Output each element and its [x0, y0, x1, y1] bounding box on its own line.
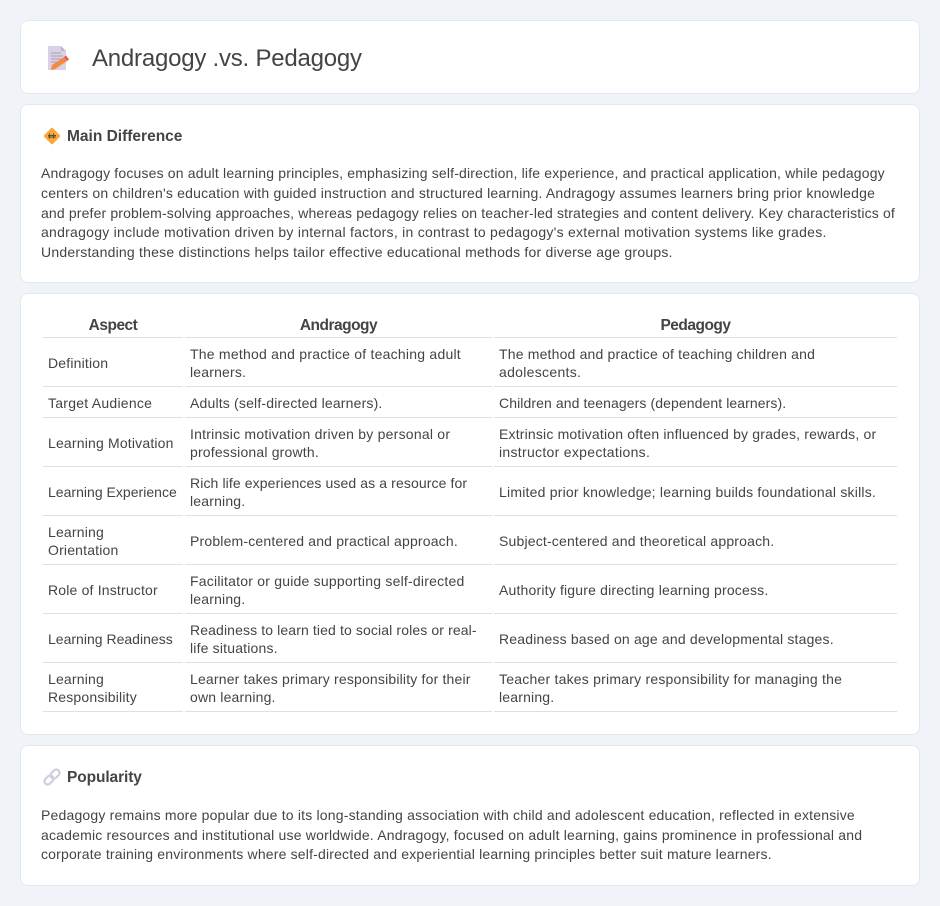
text block: popularity: Pedagogy remains more popular due to its long-standing association with child and adolescent education, reflected in extensive	[41, 807, 855, 823]
icon: document with pencil	[48, 46, 69, 70]
text block: main difference: andragogy include motivation driven by internal factors, in contrast to pedagogy's external motivation systems like grades.	[41, 224, 827, 240]
comparison table	[43, 317, 897, 712]
table header: andragogy: Andragogy	[300, 317, 377, 334]
comparison table: Learning	[48, 524, 104, 540]
comparison table: The method and practice of teaching adult	[190, 346, 461, 362]
comparison table: Orientation	[48, 542, 118, 558]
text block: main difference: and prefer problem-solving approaches, whereas pedagogy relies on teacher-led strategies and content delivery. Key characteristics of	[41, 205, 895, 221]
text block: main difference: centers on children's education with guided instruction and structured learning. Andragogy assumes learners bring prior knowledge	[41, 185, 875, 201]
row: definition	[48, 346, 815, 380]
row: target audience	[48, 395, 786, 411]
comparison table: Learner takes primary responsibility for their	[190, 671, 471, 687]
comparison table: Extrinsic motivation often influenced by grades, rewards, or	[499, 426, 876, 442]
text block: popularity: corporate training environments where self-directed and experiential learning principles better suit mature learners.	[41, 846, 772, 862]
comparison table: Facilitator or guide supporting self-directed	[190, 573, 464, 589]
comparison table: Children and teenagers (dependent learners).	[499, 395, 786, 411]
table header: pedagogy: Pedagogy	[660, 317, 731, 334]
comparison table: The method and practice of teaching children and	[499, 346, 815, 362]
panel: main difference	[20, 104, 920, 283]
comparison table: professional growth.	[190, 444, 319, 460]
comparison table: learning.	[190, 591, 245, 607]
heading: popularity: Popularity	[67, 769, 142, 786]
comparison table: Readiness based on age and developmental stages.	[499, 631, 834, 647]
text block: main difference: Andragogy focuses on adult learning principles, emphasizing self-direction, life experience, and practical application, while pedagogy	[41, 165, 885, 181]
comparison table: Learning Experience	[48, 484, 177, 500]
table header: aspect: Aspect	[89, 317, 137, 334]
panel: comparison table	[20, 293, 920, 735]
comparison table: Teacher takes primary responsibility for managing the	[499, 671, 842, 687]
title: Andragogy .vs. Pedagogy	[92, 45, 362, 72]
comparison table: learners.	[190, 364, 246, 380]
icon: chain link	[43, 768, 61, 786]
text block: main difference	[41, 165, 895, 260]
row: learning experience	[48, 475, 876, 509]
comparison table: Rich life experiences used as a resource for	[190, 475, 467, 491]
comparison table: own learning.	[190, 689, 276, 705]
comparison table: Limited prior knowledge; learning builds foundational skills.	[499, 484, 876, 500]
comparison table: Readiness to learn tied to social roles or real-	[190, 622, 477, 638]
comparison table: Learning Motivation	[48, 435, 174, 451]
comparison table: learning.	[499, 689, 554, 705]
row: role of instructor	[48, 573, 768, 607]
comparison table: instructor expectations.	[499, 444, 650, 460]
comparison table: adolescents.	[499, 364, 581, 380]
comparison table: Intrinsic motivation driven by personal or	[190, 426, 450, 442]
comparison table: Responsibility	[48, 689, 137, 705]
comparison table: Subject-centered and theoretical approach.	[499, 533, 774, 549]
comparison table: Learning Readiness	[48, 631, 173, 647]
text block: main difference: Understanding these distinctions helps tailor effective educational methods for diverse age groups.	[41, 244, 673, 260]
comparison table: learning.	[190, 493, 245, 509]
icon: diamond warning sign	[44, 128, 60, 144]
row: learning motivation	[48, 426, 876, 460]
comparison table: Role of Instructor	[48, 582, 158, 598]
row: learning readiness	[48, 622, 834, 656]
panel: title	[20, 20, 920, 94]
comparison table: Problem-centered and practical approach.	[190, 533, 458, 549]
heading: main difference: Main Difference	[67, 128, 182, 145]
comparison table: life situations.	[190, 640, 278, 656]
comparison table: Definition	[48, 355, 108, 371]
comparison table: Adults (self-directed learners).	[190, 395, 382, 411]
comparison table: Authority figure directing learning process.	[499, 582, 768, 598]
comparison table: Learning	[48, 671, 104, 687]
panel: popularity	[20, 745, 920, 886]
text block: popularity	[41, 807, 862, 862]
comparison table: Target Audience	[48, 395, 152, 411]
row: learning responsibility	[48, 671, 842, 705]
row: learning orientation	[48, 524, 774, 558]
text block: popularity: academic resources and institutional use worldwide. Andragogy, focused on adult learning, gains prominence in professional and	[41, 827, 862, 843]
